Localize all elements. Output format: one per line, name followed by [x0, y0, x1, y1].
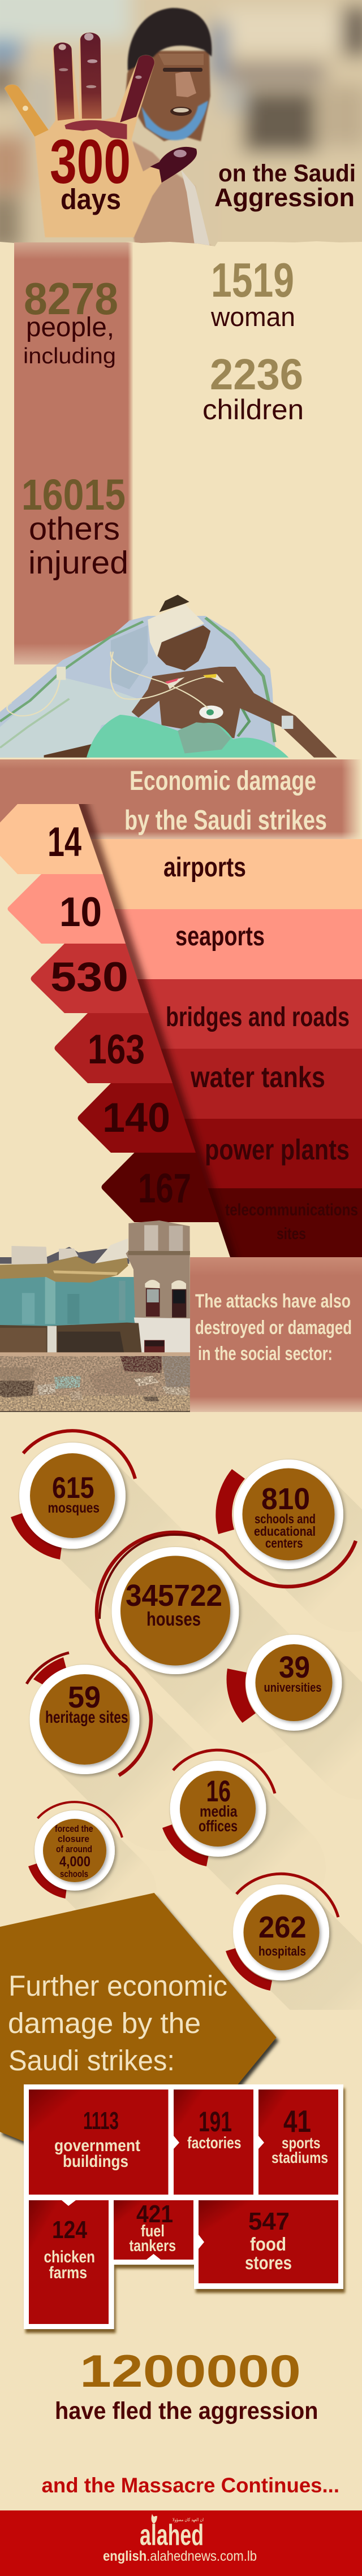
- heading: Further economic damage by the Saudi strikes: Saudi strikes:: [8, 2044, 175, 2077]
- colored bands with diagonal shadow: [79, 804, 362, 1257]
- injured: injured: [28, 545, 128, 581]
- tile: 547 food stores: 547: [248, 2208, 290, 2235]
- tile: 124 chicken farms: 124: [52, 2216, 87, 2244]
- people,: people,: [26, 312, 114, 342]
- arrow: 163 water tanks: 163: [88, 1027, 145, 1072]
- hospital net: [87, 715, 288, 758]
- tile: 547 food stores: stores: [245, 2252, 292, 2273]
- rubble: [0, 1352, 190, 1396]
- blurred street background: [0, 0, 362, 271]
- stat circle: 59 heritage sites: heritage sites: [45, 1708, 128, 1727]
- children: children: [202, 394, 304, 425]
- tile: 1113 government buildings: 1113: [83, 2107, 119, 2135]
- torso and arms: [132, 667, 337, 758]
- brown polygon behind further damage heading: [0, 1893, 279, 2145]
- stat circle: forced the closure of around 4,000 schools: schools: [60, 1869, 88, 1879]
- arrow: 14 airports: [0, 804, 246, 883]
- arrow: 140 power plants: [78, 1083, 350, 1166]
- man: face mask: [141, 101, 208, 140]
- stat circle: 262 hospitals: [226, 1874, 338, 1991]
- have fled the aggression: have fled the aggression: [55, 2397, 318, 2425]
- others: others: [29, 511, 120, 547]
- stat circle: 345722 houses: [112, 1547, 239, 1674]
- pinky orange tint: [5, 85, 49, 137]
- man: scarf: [132, 141, 212, 246]
- tile: 124 chicken farms: [29, 2200, 109, 2324]
- brick tower: [126, 1220, 190, 1318]
- arrow: 167 telecommunications sites: [102, 1153, 358, 1243]
- tile: 191 factories: 191: [199, 2106, 232, 2138]
- tile: 547 food stores: food: [250, 2234, 286, 2254]
- stat circle: 345722 houses: 345722: [126, 1579, 222, 1613]
- footer: [0, 2510, 362, 2576]
- teal interior: [0, 1277, 136, 1326]
- mountains and parapet: [0, 1247, 130, 1264]
- hand: [5, 33, 197, 237]
- stat circle: 615 mosques: 615: [52, 1471, 94, 1505]
- stat circle: 16 media offices: 16: [206, 1775, 231, 1808]
- arrow: 163 water tanks: water tanks: [190, 1061, 325, 1094]
- stat circle: forced the closure of around 4,000 schools: 4,000: [59, 1854, 90, 1870]
- chart: economic damage bands: [0, 797, 362, 1263]
- stat circle: 262 hospitals: 262: [258, 1910, 307, 1944]
- heading: Further economic damage by the Saudi strikes: damage by the: [8, 2007, 201, 2039]
- stat circle: 810 schools and educational centers: centers: [265, 1536, 303, 1550]
- stat circle: 39 universities: 39: [279, 1650, 310, 1684]
- white lower wall: [133, 1318, 190, 1353]
- including: including: [23, 344, 116, 368]
- stat circle: 39 universities: [226, 1635, 342, 1731]
- heading: Further economic damage by the Saudi strikes: Further economic: [8, 1970, 227, 2002]
- woman: woman: [210, 302, 295, 332]
- tower windows: [145, 1280, 160, 1288]
- ruined ground floor: [0, 1322, 141, 1353]
- arrow: 167 telecommunications sites: 167: [138, 1166, 191, 1211]
- tile: 421 fuel tankers: 421: [136, 2200, 173, 2228]
- stat circle: 810 schools and educational centers: schools and: [255, 1511, 316, 1526]
- S-curve ribbon linking circles: [97, 1532, 356, 1775]
- number: 1200000: 1200000: [80, 2346, 301, 2397]
- man: face: [126, 51, 210, 141]
- text: The attacks have also destroyed or damaged in the social sector: [195, 1291, 352, 1365]
- number: 2236: 2236: [210, 350, 303, 399]
- hair: [160, 595, 189, 612]
- arrow: 530 bridges and roads: [31, 944, 350, 1032]
- stat circle: 615 mosques: mosques: [48, 1500, 100, 1516]
- tile: 124 chicken farms: farms: [49, 2264, 87, 2282]
- stat circle: forced the closure of around 4,000 schools: of around: [56, 1844, 92, 1854]
- tile: 124 chicken farms: chicken: [44, 2248, 95, 2266]
- arrow: 530 bridges and roads: 530: [50, 954, 128, 1000]
- tile grid: further damage: [24, 2084, 343, 2329]
- arrow: 14 airports: 14: [48, 819, 81, 865]
- logo: alahed: [140, 2514, 204, 2552]
- stat circle: 345722 houses: houses: [146, 1609, 201, 1630]
- stat circle: 39 universities: universities: [264, 1680, 321, 1695]
- and the Massacre Continues: and the Massacre Continues...: [42, 2474, 339, 2497]
- stat circle: 59 heritage sites: [27, 1653, 139, 1774]
- stat circle: 615 mosques: [11, 1431, 135, 1559]
- tile: 41 sports stadiums: sports: [282, 2134, 320, 2152]
- blood on fingers: [54, 42, 74, 120]
- panel: economic damage header: [0, 759, 362, 840]
- Aggression: Aggression: [214, 183, 355, 212]
- hero photo: man showing bloodied hand: [0, 0, 362, 271]
- child face: [157, 625, 210, 671]
- tile: 421 fuel tankers: fuel: [141, 2222, 165, 2240]
- stat circle: forced the closure of around 4,000 schools: [28, 1802, 122, 1899]
- arrow: 10 seaports: seaports: [175, 922, 265, 952]
- hospital sheet: [0, 616, 277, 758]
- panel: social sector: [190, 1257, 362, 1412]
- tile: 41 sports stadiums: [258, 2090, 338, 2195]
- tile: 41 sports stadiums: 41: [283, 2104, 311, 2139]
- stat circle: forced the closure of around 4,000 schools: closure: [58, 1834, 89, 1844]
- electrodes and wires: [199, 706, 223, 719]
- heading: Further economic damage by the Saudi strikes: [8, 1970, 227, 2077]
- photo: destroyed building: [0, 1220, 190, 1412]
- tile: 191 factories: factories: [187, 2134, 241, 2152]
- tile: 41 sports stadiums: stadiums: [272, 2149, 328, 2166]
- stat circle: 262 hospitals: hospitals: [258, 1944, 306, 1958]
- number: 1519: 1519: [211, 254, 294, 307]
- logo: alahed: ان العهد كان مسؤولا: [173, 2517, 204, 2522]
- left leg: [44, 744, 92, 758]
- palm and fingers: [5, 33, 197, 237]
- tile: 191 factories: [174, 2090, 253, 2195]
- stat circle: 16 media offices: [162, 1750, 275, 1866]
- tile: 1113 government buildings: government: [54, 2136, 140, 2155]
- on the Saudi: on the Saudi: [218, 160, 356, 187]
- arrow: 10 seaports: 10: [59, 889, 102, 935]
- arrow: 14 airports: airports: [163, 853, 246, 883]
- collapsed roof: [0, 1256, 128, 1283]
- stat circle: 810 schools and educational centers: [216, 1459, 343, 1569]
- number: 8278: 8278: [24, 273, 118, 324]
- days: days: [61, 183, 121, 215]
- long shadows behind circles: [72, 1496, 362, 2013]
- tile: 1113 government buildings: [29, 2090, 169, 2195]
- photo: injured child: [0, 595, 337, 758]
- website url: english.alahednews.com.lb: [103, 2548, 257, 2564]
- stat circle: 810 schools and educational centers: educational: [254, 1524, 316, 1539]
- stat circle: 810 schools and educational centers: 810: [261, 1482, 310, 1516]
- arrow: 167 telecommunications sites: sites: [277, 1225, 306, 1243]
- stat circle: forced the closure of around 4,000 schools: forced the: [55, 1823, 93, 1834]
- arrow: 10 seaports: [8, 874, 265, 952]
- icon: flame: [152, 2514, 157, 2523]
- tile: 547 food stores: [199, 2200, 338, 2283]
- head bandage: [148, 603, 204, 657]
- 300: 300: [50, 127, 131, 197]
- arrow: 163 water tanks: [54, 1013, 325, 1094]
- tile: 421 fuel tankers: [114, 2200, 193, 2260]
- stat circle: 16 media offices: offices: [199, 1817, 238, 1835]
- stat circle: 16 media offices: media: [200, 1802, 238, 1820]
- tile: 1113 government buildings: buildings: [63, 2152, 128, 2171]
- logo: alahed: alahed: [140, 2519, 204, 2552]
- number: 16015: 16015: [21, 471, 126, 519]
- arrow: 140 power plants: 140: [102, 1095, 170, 1141]
- tile: 421 fuel tankers: tankers: [129, 2237, 176, 2255]
- stat circle: 59 heritage sites: 59: [68, 1680, 101, 1714]
- man: hair: [128, 8, 212, 71]
- panel: casualties: [14, 242, 133, 664]
